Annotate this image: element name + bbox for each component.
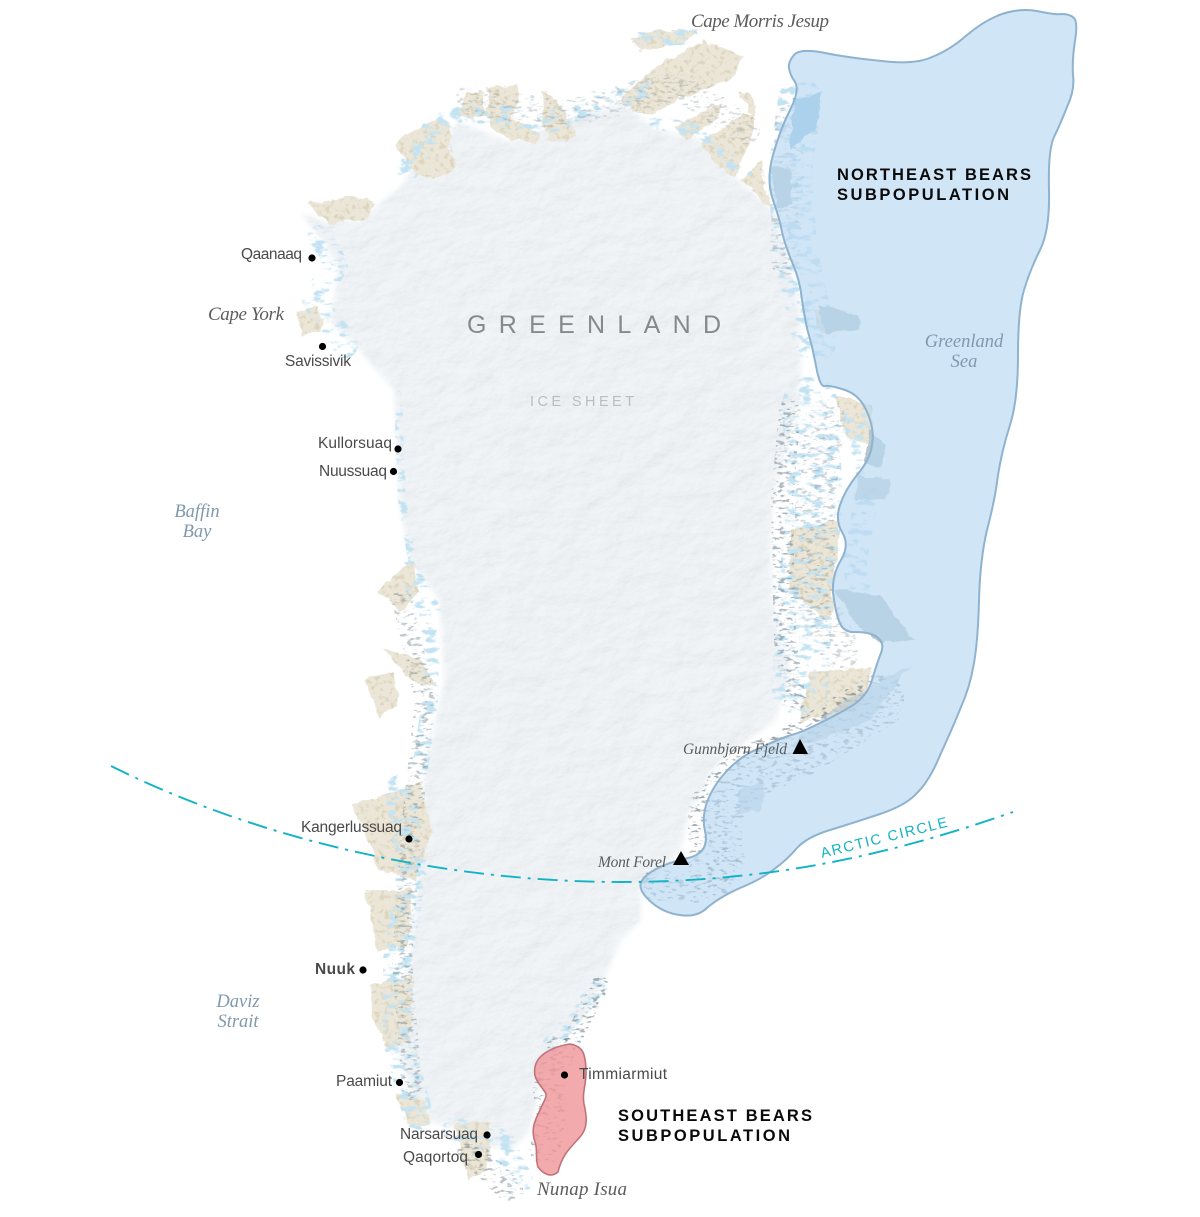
label: Cape Morris Jesup: Cape Morris Jesup [691, 11, 829, 32]
label: Baffin Bay: Bay [183, 522, 212, 542]
heading: northeast bears: NORTHEAST BEARS [837, 166, 1031, 184]
town: Narsarsuaq: Narsarsuaq [400, 1126, 478, 1143]
label: Greenland Sea: Greenland [925, 332, 1003, 352]
town: Nuussuaq: Nuussuaq [319, 463, 387, 480]
label: ice sheet: ICE SHEET [530, 394, 634, 410]
label: Daviz Strait: Daviz [216, 992, 260, 1012]
town: Nuuk: Nuuk [315, 961, 355, 978]
rock mottling [295, 30, 872, 1180]
label: Cape York: Cape York [208, 304, 285, 325]
region: northeast bears subpopulation [640, 10, 1076, 916]
peak: Mont Forel: Mont Forel [597, 854, 666, 871]
label: Daviz Strait: Strait [217, 1012, 259, 1032]
label: Greenland Sea: Sea [951, 352, 977, 372]
town: Paamiut: Paamiut [336, 1073, 393, 1090]
label: Baffin Bay: Baffin [174, 502, 220, 522]
arctic circle label: ARCTIC CIRCLE [819, 815, 949, 862]
town: Qaqortoq: Qaqortoq [403, 1149, 468, 1166]
label: Nunap Isua: Nunap Isua [536, 1179, 627, 1200]
grey land under the northeast range [735, 92, 915, 815]
peak: Mont Forel [597, 851, 689, 871]
exposed rock along the coast [295, 30, 872, 1180]
heading: northeast bears: SUBPOPULATION [837, 186, 1009, 204]
town: Kullorsuaq: Kullorsuaq [318, 435, 392, 452]
town: Timmiarmiut: Timmiarmiut [579, 1066, 668, 1083]
heading: southeast bears: SUBPOPULATION [618, 1127, 790, 1145]
heading: southeast bears: SOUTHEAST BEARS [618, 1107, 812, 1125]
map of Greenland [110, 9, 1078, 1202]
arctic circle line [111, 766, 1013, 882]
peak: Gunnbjorn Fjeld: Gunnbjørn Fjeld [683, 741, 787, 758]
town: Kangerlussuaq: Kangerlussuaq [301, 819, 402, 836]
heading: southeast bears [618, 1107, 812, 1145]
town: Qaanaaq: Qaanaaq [241, 246, 302, 263]
region: southeast bears subpopulation [533, 1044, 586, 1175]
town: Savissivik [285, 343, 351, 370]
fjords and valleys mottling [402, 85, 880, 1190]
ice sheet [304, 104, 801, 1149]
heading: northeast bears [837, 166, 1031, 204]
town: Kangerlussuaq [301, 819, 413, 843]
glacier blue mottling along the coasts [315, 36, 870, 1180]
heading: Greenland: GREENLAND [467, 311, 721, 339]
town: Savissivik: Savissivik [285, 353, 351, 370]
